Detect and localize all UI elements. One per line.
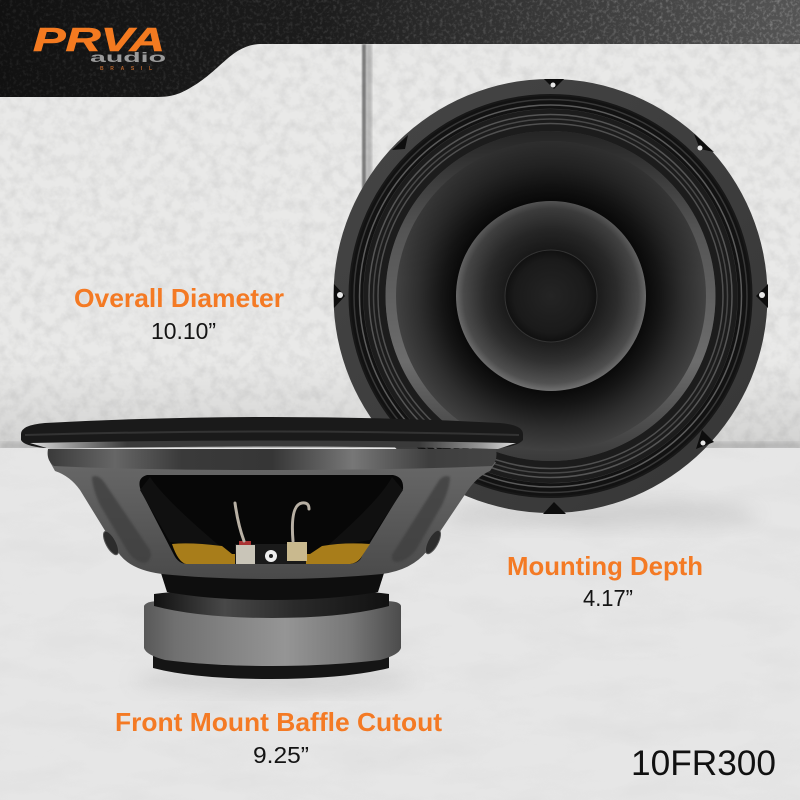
- cone texture inside window: [140, 477, 403, 548]
- cone shading: [396, 141, 706, 451]
- model number: 10FR300: [631, 744, 776, 783]
- basket ribs: [92, 476, 450, 563]
- logo wordmark: PRVA: [33, 21, 165, 58]
- dust cap shading: [456, 201, 646, 391]
- background: floor: [0, 448, 800, 800]
- logo subword: audio: [90, 49, 166, 65]
- heading: Front Mount Baffle Cutout: [115, 707, 442, 737]
- header: dark textured banner: [0, 0, 800, 100]
- speaker: front view: [334, 79, 768, 522]
- speaker: side view: [21, 417, 523, 687]
- flange lower edge: [30, 440, 516, 449]
- mounting notches: [334, 79, 768, 514]
- value: 4.17”: [583, 585, 633, 611]
- cone: [396, 141, 706, 451]
- logo: PRV audio Brasil: [33, 21, 166, 72]
- basket band: [48, 449, 496, 470]
- basket body: [50, 462, 496, 579]
- dust cap core: [505, 250, 597, 342]
- lead wires: [235, 503, 309, 541]
- top flange: [21, 417, 523, 448]
- logo country: BRASIL: [100, 66, 152, 72]
- flange highlight: [25, 432, 519, 435]
- label: mounting depth: [507, 551, 703, 611]
- label: front mount baffle cutout: [115, 707, 442, 768]
- neck: [160, 570, 385, 600]
- magnet top plate: [154, 588, 389, 618]
- label: overall diameter: [74, 283, 284, 344]
- floor shadow of side speaker: [132, 673, 412, 687]
- magnet bottom plate: [153, 650, 389, 679]
- heading: Overall Diameter: [74, 283, 284, 313]
- yellow spider: [172, 543, 370, 564]
- magnet: [144, 601, 401, 666]
- cone edge ring: [386, 131, 716, 461]
- value: 9.25”: [253, 742, 309, 768]
- dust cap: [456, 201, 646, 391]
- terminal block: [235, 541, 307, 564]
- value: 10.10”: [151, 318, 216, 344]
- mounting frame: [334, 79, 768, 513]
- floor shadow of front speaker: [440, 506, 760, 522]
- mounting screws: [100, 528, 444, 557]
- heading: Mounting Depth: [507, 551, 703, 581]
- surround ridges: [350, 95, 752, 497]
- basket window: [139, 475, 403, 564]
- background: concrete wall: [0, 0, 800, 450]
